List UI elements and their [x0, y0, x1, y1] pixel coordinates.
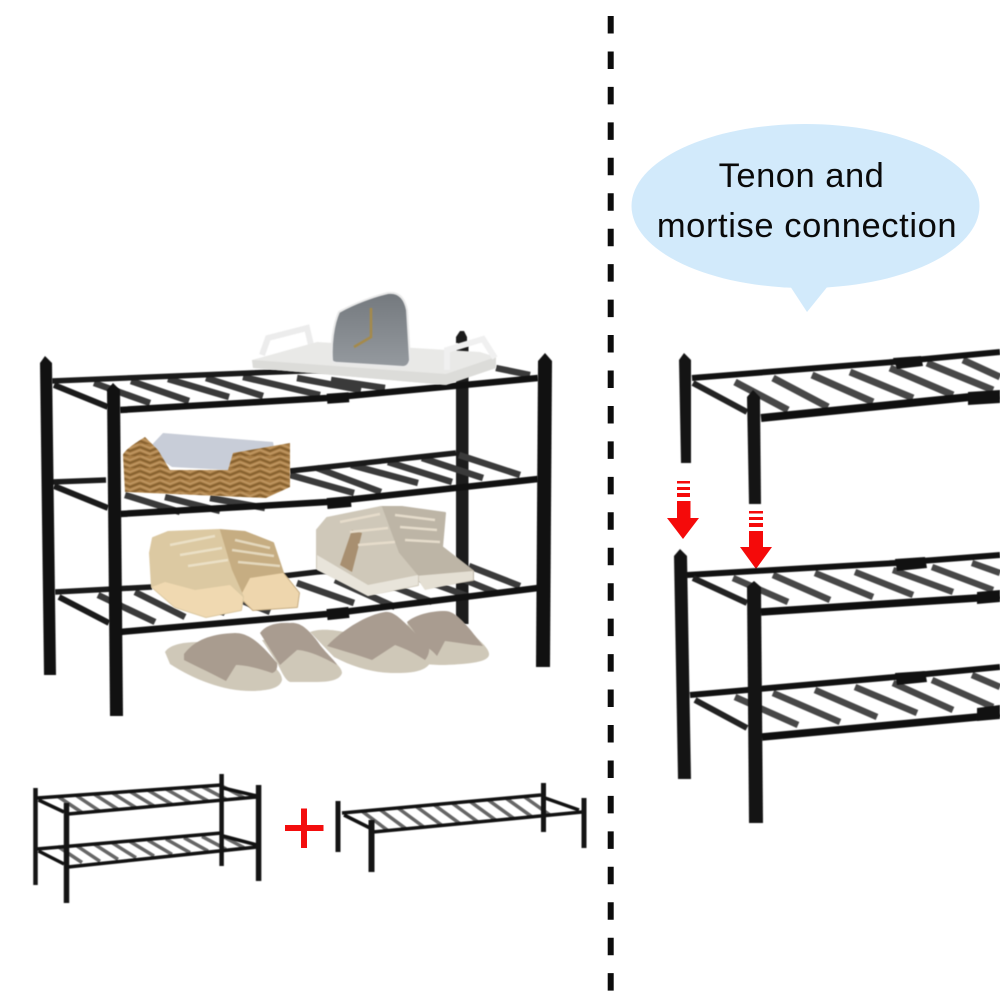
slats [362, 796, 550, 831]
posts [679, 353, 691, 463]
speech bubble: Tenon and mortise connection: Tenon and [719, 157, 884, 195]
rail connectors [326, 392, 351, 620]
arrow: right red down arrow [740, 511, 772, 569]
slats [735, 360, 1000, 410]
rails [37, 785, 257, 867]
speech bubble: Tenon and mortise connection: mortise connection [657, 207, 957, 245]
slipper 1 [165, 633, 282, 691]
detail rack: upper section [679, 352, 1000, 504]
shelf front rails [120, 378, 538, 632]
wicker basket with towel [123, 433, 290, 498]
basket [123, 437, 290, 498]
slats upper [58, 785, 244, 812]
clock [332, 293, 410, 367]
right pair left shoe [317, 507, 418, 596]
shelf slats [94, 368, 530, 622]
main product: three-tier shoe rack [52, 346, 538, 632]
posts [674, 549, 691, 779]
slipper 2 [260, 623, 342, 682]
left pair right shoe [219, 530, 299, 610]
detail rack: lower section [674, 549, 1000, 823]
slipper 4 [407, 611, 489, 665]
beige sneakers [150, 507, 473, 617]
rails [692, 352, 1000, 378]
small two-tier rack [36, 774, 259, 903]
speech bubble: Tenon and mortise connection [632, 124, 980, 312]
plus sign [285, 808, 324, 848]
slipper 3 [310, 612, 430, 673]
small one-tier rack [338, 783, 584, 872]
slats lower [58, 835, 244, 862]
right pair right shoe [381, 507, 473, 590]
tray with clock [252, 293, 496, 385]
rails [687, 555, 1000, 695]
slippers [165, 611, 489, 691]
arrow: left red down arrow [667, 481, 699, 539]
posts [338, 783, 584, 852]
back post peg [456, 331, 467, 350]
rails [342, 795, 582, 832]
dashed divider [608, 16, 614, 992]
connectors [895, 557, 1000, 721]
connectors [893, 356, 1000, 405]
rack front posts [40, 353, 552, 716]
rack back post [456, 346, 468, 624]
posts [36, 774, 222, 885]
left handle [262, 328, 311, 355]
slats [733, 563, 1000, 602]
right handle [447, 339, 495, 370]
tray body [252, 342, 496, 385]
shelf side rails and back rails [52, 365, 462, 623]
towel [147, 433, 275, 470]
left pair left shoe [150, 530, 243, 617]
